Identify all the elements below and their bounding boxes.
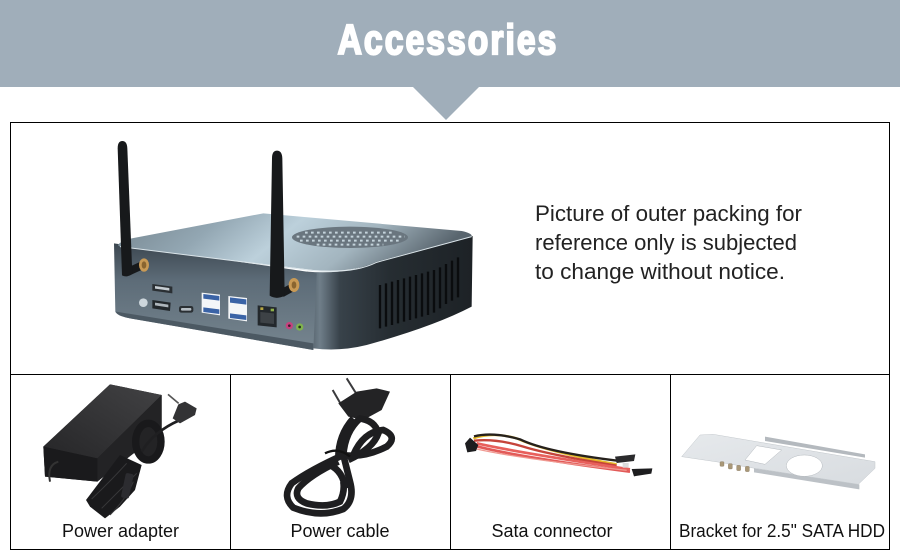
- packing note: [535, 201, 802, 284]
- title: Accessories: [338, 18, 558, 64]
- label: power cable: Power cable: [290, 521, 390, 541]
- side of case: [307, 236, 473, 349]
- panel: bracket: [670, 374, 890, 550]
- packing note: to change without notice.: [535, 259, 785, 284]
- icon: power cable: [287, 378, 392, 513]
- top vent: [292, 227, 408, 248]
- panel: power adapter: [10, 374, 230, 550]
- label: power adapter: Power adapter: [62, 521, 179, 541]
- top plate: [118, 213, 472, 271]
- cable coil: [86, 455, 142, 518]
- panel: power cable: [230, 374, 450, 550]
- header banner: [0, 0, 900, 120]
- icon: sata cables: [465, 435, 652, 476]
- packing note: Picture of outer packing for: [535, 201, 802, 226]
- front of case: [114, 243, 317, 350]
- panel: main product: [10, 122, 890, 374]
- icon: bracket: [682, 434, 875, 489]
- mini PC illustration: [114, 141, 473, 350]
- antennas: [118, 141, 132, 276]
- packing note: reference only is subjected: [535, 230, 797, 255]
- label: bracket: Bracket for 2.5" SATA HDD: [679, 521, 885, 541]
- icon: power adapter: [43, 384, 197, 518]
- antenna connectors: [128, 264, 145, 272]
- label: sata connector: Sata connector: [492, 521, 613, 541]
- side vents: [380, 257, 458, 328]
- panel: sata connector: [450, 374, 670, 550]
- ports: [152, 284, 172, 293]
